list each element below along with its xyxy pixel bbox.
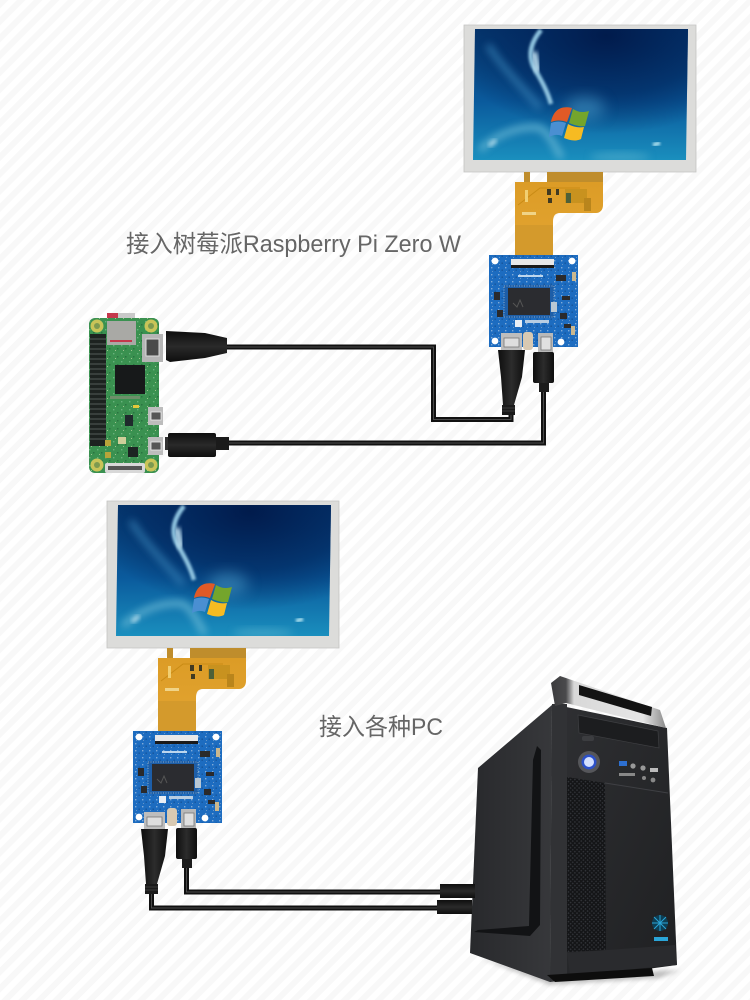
PC power button bbox=[578, 751, 600, 773]
PC front panel seam bbox=[605, 783, 668, 793]
PC logo bbox=[652, 915, 668, 941]
PC feet bbox=[547, 968, 654, 982]
heading: Raspberry Pi Zero W: 接入树莓派Raspberry Pi Zero W bbox=[126, 231, 461, 258]
PC base trim bbox=[567, 945, 677, 975]
top HDMI plug bbox=[498, 333, 525, 415]
PC handle slot bbox=[579, 685, 652, 716]
lower LCD screen with flex cable bbox=[107, 501, 339, 731]
PC eject button bbox=[582, 736, 594, 741]
Raspberry Pi Zero W board bbox=[89, 313, 163, 473]
lower USB plug bbox=[176, 809, 197, 868]
PC side recess bbox=[474, 746, 541, 936]
PC corner pillar bbox=[550, 704, 567, 982]
Pi micro-USB plug bbox=[165, 433, 229, 457]
lower driver board bbox=[133, 731, 222, 826]
cable: HDMI from Raspberry Pi to top driver board bbox=[226, 347, 511, 420]
PC front IO ports bbox=[619, 761, 658, 782]
heading: PC: 接入各种PC bbox=[319, 714, 443, 741]
cable: USB from PC to lower driver board bbox=[186, 868, 445, 892]
PC side panel bbox=[470, 705, 552, 982]
lower HDMI plug bbox=[141, 812, 168, 894]
PC shadow bbox=[480, 958, 680, 985]
PC handle bbox=[551, 676, 666, 728]
PC front panel bbox=[550, 704, 677, 982]
top LCD screen with flex cable bbox=[464, 25, 696, 255]
PC optical drive bay bbox=[578, 715, 659, 748]
cable: USB from Raspberry Pi to top driver board bbox=[228, 390, 544, 443]
top USB plug bbox=[533, 333, 554, 392]
PC USB plug bbox=[440, 884, 475, 898]
PC HDMI plug bbox=[437, 900, 472, 914]
desktop PC tower bbox=[470, 676, 680, 985]
PC front mesh bbox=[567, 777, 606, 952]
cable: HDMI from PC to lower driver board bbox=[152, 885, 440, 908]
Pi mini-HDMI plug bbox=[166, 331, 227, 362]
top driver board bbox=[489, 255, 578, 350]
